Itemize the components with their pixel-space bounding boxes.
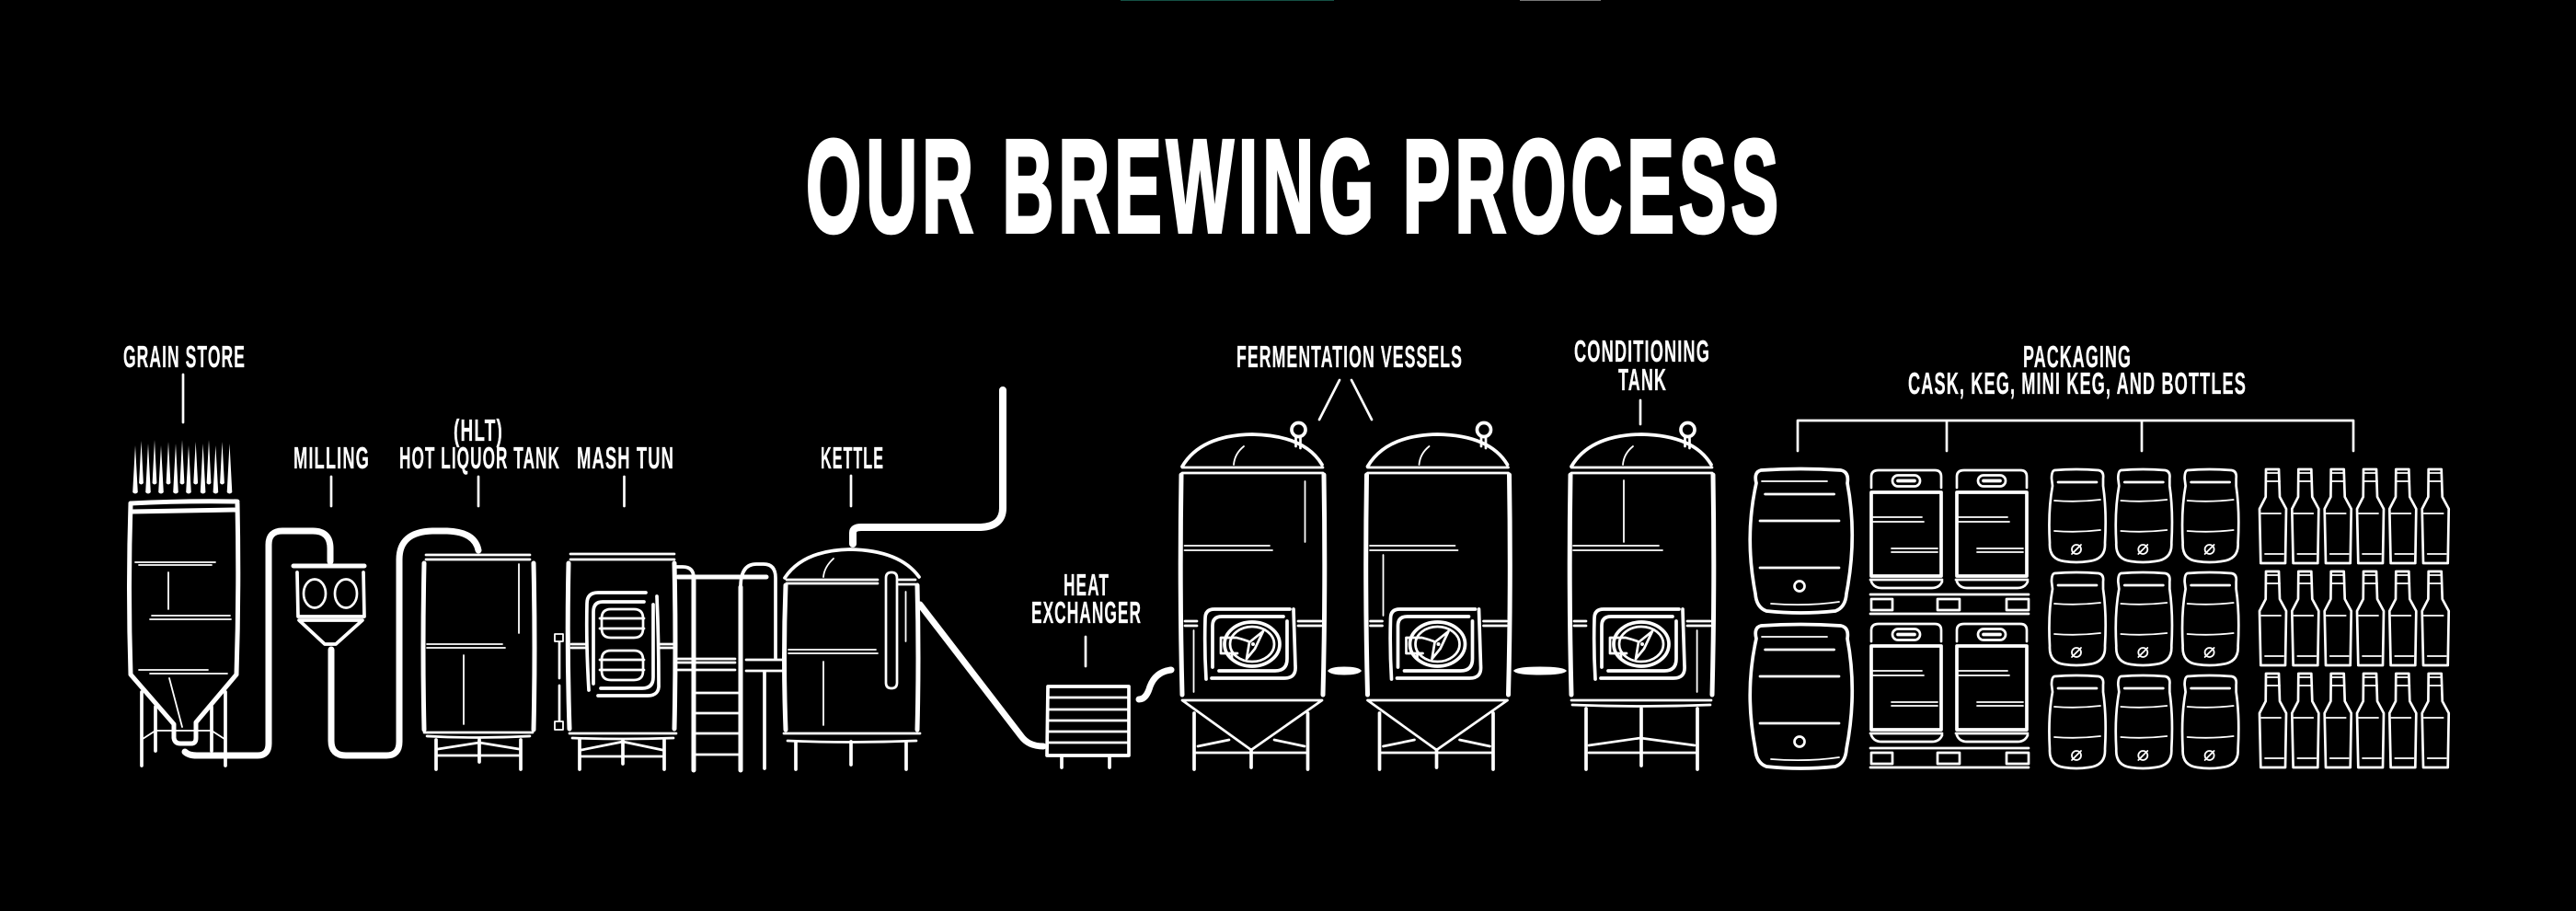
fermentation vessels: [1180, 340, 1510, 769]
icon: heat exchanger: [1047, 686, 1129, 767]
pipe: kettle vent: [853, 390, 1003, 544]
leader: mash tun: [623, 477, 626, 506]
icon: grain spikes: [132, 440, 232, 493]
leader: heat exchanger: [1085, 637, 1087, 666]
title: OUR BREWING PROCESS: [806, 112, 1783, 260]
icon: conditioning tank: [1570, 423, 1714, 769]
icon: mash tun: [555, 554, 676, 769]
label: fermentation vessels: FERMENTATION VESSELS: [1236, 340, 1463, 374]
conditioning tank: [1570, 334, 1714, 769]
label: tank: TANK: [1618, 363, 1667, 397]
label: milling: MILLING: [293, 441, 370, 475]
label: hot liquor tank: HOT LIQUOR TANK: [399, 441, 560, 475]
pipe: mill to hot liquor tank: [331, 531, 478, 755]
leader: kettle: [850, 476, 852, 506]
pipe: fermenter two to conditioning tank: [1513, 666, 1567, 675]
leader: conditioning tank: [1639, 400, 1641, 424]
mash tun: [555, 441, 676, 769]
label: packaging: PACKAGING: [2023, 340, 2132, 374]
label: grain store: GRAIN STORE: [123, 340, 246, 374]
heat exchanger: [1031, 568, 1142, 767]
icon: silo: [129, 502, 238, 766]
mini kegs: [2049, 469, 2238, 768]
leader: milling: [330, 477, 332, 506]
icon: tank: [423, 555, 535, 769]
leader: hot liquor tank: [477, 477, 479, 506]
icon: fermenter one: [1180, 423, 1325, 769]
icon: fermenter two: [1366, 423, 1510, 769]
ladder platform: [675, 564, 783, 770]
bracket: [1798, 421, 2353, 451]
leader: grain store: [182, 375, 184, 422]
bottles: [2260, 469, 2449, 767]
kettle: [784, 441, 920, 769]
pipe: heat exchanger to fermenter: [1139, 670, 1171, 699]
kegs on pallets: [1870, 470, 2029, 767]
packaging: [1750, 340, 2449, 768]
kettle: KETTLE: [821, 441, 884, 475]
milling: [293, 441, 370, 644]
icon: mill: [293, 566, 364, 644]
icon: kettle: [784, 549, 920, 769]
pipe: kettle to heat exchanger: [920, 605, 1043, 746]
label: exchanger: EXCHANGER: [1031, 595, 1142, 629]
pipe: fermenter one to two: [1328, 666, 1362, 675]
label: heat: HEAT: [1064, 568, 1110, 602]
label: HLT: (HLT): [454, 413, 503, 447]
pipe: silo to mill: [185, 531, 330, 755]
leaders: fermentation vessels: [1319, 380, 1372, 420]
label: mash tun: MASH TUN: [577, 441, 674, 475]
label: conditioning: CONDITIONING: [1574, 334, 1710, 368]
top edge remnant: [1121, 0, 1601, 1]
grain store: [123, 340, 246, 766]
casks: [1750, 469, 1852, 768]
label: cask keg mini keg and bottles: CASK, KEG, MINI KEG, AND BOTTLES: [1908, 366, 2247, 400]
hot liquor tank: [399, 413, 560, 769]
